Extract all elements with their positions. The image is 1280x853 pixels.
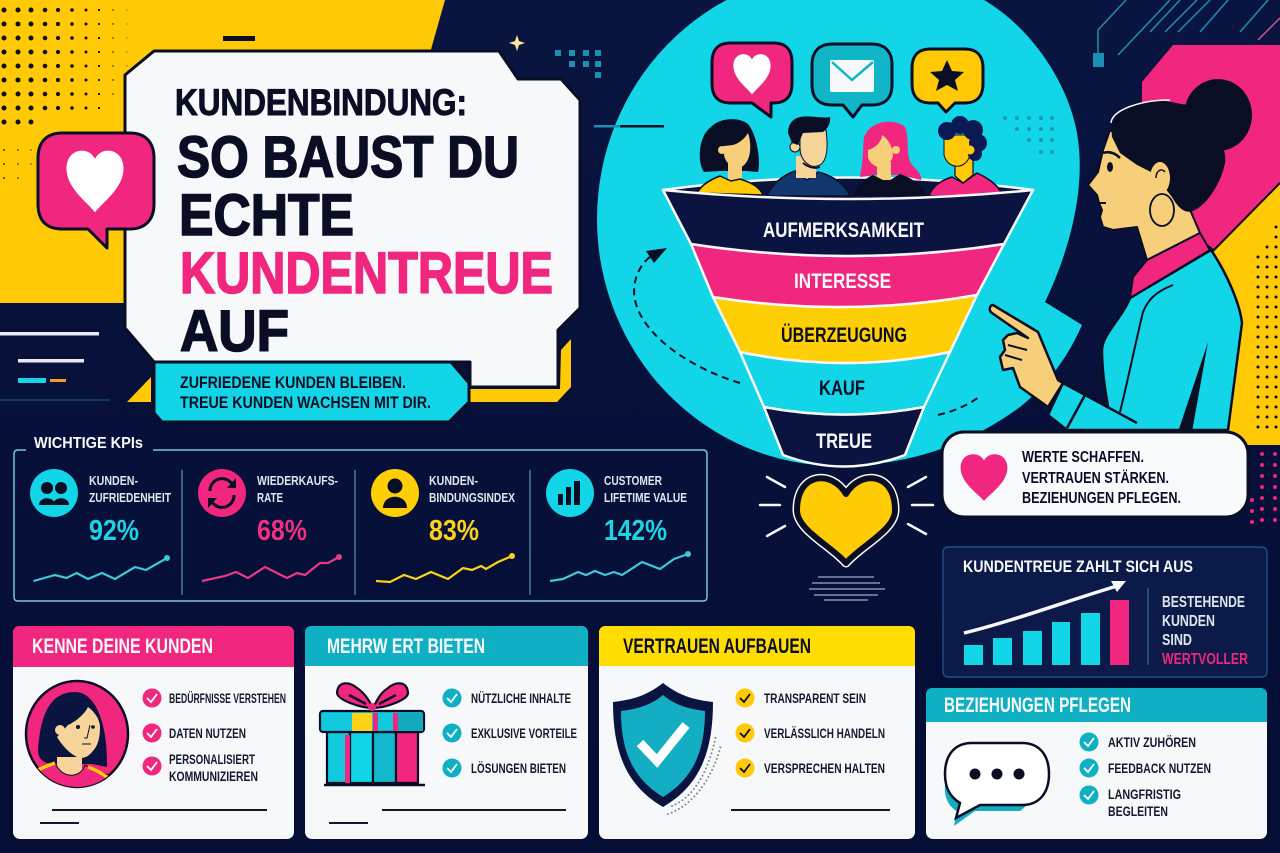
funnel stage: Kauf: KAUF (819, 377, 865, 400)
checklist (1080, 732, 1211, 819)
funnel stage: Treue (764, 407, 924, 466)
KPI 1: ZUFRIEDENHEIT (89, 490, 171, 505)
panel: Mehrwert bieten: MEHRW ERT BIETEN (327, 635, 485, 658)
icon: pink heart speech bubble (38, 133, 154, 248)
yellow background shape top left (0, 0, 445, 303)
cyan circle background (597, 0, 1082, 466)
panel: Kundentreue zahlt sich aus (943, 547, 1267, 677)
icon: gift box (320, 683, 425, 785)
checklist: DATEN NUTZEN (169, 726, 246, 741)
title text: ECHTE (179, 183, 354, 248)
KPI 3: 83% (429, 515, 479, 547)
funnel stage: Aufmerksamkeit (663, 190, 1033, 256)
panel: Kundentreue zahlt sich aus: KUNDENTREUE ZAHLT SICH AUS (963, 557, 1193, 576)
dashed loop arrow (634, 248, 979, 415)
panel: Beziehungen pflegen: BEZIEHUNGEN PFLEGEN (944, 694, 1131, 717)
decorative sparkle and pixels (509, 35, 601, 78)
KPI 1: 92% (89, 515, 139, 547)
neck and face (1088, 130, 1200, 260)
funnel stage: Treue: TREUE (816, 430, 872, 453)
icon: speech bubble heart (712, 43, 792, 117)
callout box: BEZIEHUNGEN PFLEGEN. (1022, 490, 1181, 507)
checklist: LÖSUNGEN BIETEN (471, 761, 566, 776)
callout box: VERTRAUEN STÄRKEN. (1022, 469, 1169, 487)
KPI 2: WIEDERKAUFS- (257, 473, 338, 488)
right background shapes (1093, 0, 1280, 530)
panel: Kundentreue zahlt sich aus: WERTVOLLER (1162, 651, 1248, 668)
customer group (697, 116, 1002, 196)
KPI heading: WICHTIGE KPIs (34, 435, 143, 452)
decorative marks on circle (594, 116, 1054, 154)
person with pointing hand (990, 79, 1252, 432)
funnel stage: Ueberzeugung: ÜBERZEUGUNG (781, 324, 907, 347)
funnel stage: Kauf (740, 352, 950, 414)
title text: AUF (180, 299, 289, 364)
panel: Mehrwert bieten (305, 626, 588, 839)
title text: KUNDENBINDUNG: (175, 82, 467, 123)
callout box: WERTE SCHAFFEN. (1022, 449, 1144, 466)
KPI 4: LIFETIME VALUE (604, 490, 687, 505)
person 2 (767, 116, 850, 196)
title text (175, 82, 553, 364)
checklist (736, 688, 885, 778)
jacket (1048, 250, 1242, 430)
decorative lines left (0, 332, 110, 401)
person 1 (697, 119, 763, 195)
icon: yellow heart with rays (760, 477, 933, 600)
person 3 (853, 122, 927, 196)
icon: speech bubble star (912, 49, 983, 112)
person 4 (929, 116, 1002, 196)
icon: customer portrait (26, 681, 128, 795)
panel: Kenne deine Kunden: KENNE DEINE KUNDEN (32, 635, 213, 658)
funnel stage: Interesse: INTERESSE (794, 270, 891, 293)
checklist: BEDÜRFNISSE VERSTEHEN (169, 691, 286, 706)
hand (990, 305, 1063, 407)
checklist: TRANSPARENT SEIN (764, 691, 866, 706)
checklist (442, 688, 577, 778)
icon: shield (613, 683, 721, 814)
funnel (663, 190, 1033, 466)
KPI 3: KUNDEN- (429, 473, 478, 488)
KPI 4: CUSTOMER (604, 473, 662, 488)
funnel stage: Aufmerksamkeit: AUFMERKSAMKEIT (763, 219, 924, 242)
hair (1184, 79, 1252, 151)
panel: Vertrauen aufbauen (599, 626, 915, 839)
KPI 1 (30, 469, 171, 581)
checklist: FEEDBACK NUTZEN (1108, 761, 1211, 776)
panel: Kundentreue zahlt sich aus: BESTEHENDE (1162, 594, 1245, 611)
checklist: EXKLUSIVE VORTEILE (471, 726, 577, 741)
checklist: VERSPRECHEN HALTEN (764, 761, 885, 776)
cyan subtitle banner: TREUE KUNDEN WACHSEN MIT DIR. (180, 393, 431, 412)
title text: SO BAUST DU (177, 125, 519, 190)
checklist: KOMMUNIZIEREN (169, 769, 258, 784)
ear and earring (1150, 162, 1170, 194)
yellow banner accents (127, 339, 571, 402)
checklist: PERSONALISIERT (169, 752, 256, 767)
cyan subtitle banner (154, 362, 469, 422)
title text: KUNDENTREUE (180, 241, 553, 306)
panel: KPIs (14, 435, 707, 601)
panel: Kundentreue zahlt sich aus: SIND (1162, 632, 1192, 649)
checklist: VERLÄSSLICH HANDELN (764, 726, 885, 741)
funnel back rim (663, 178, 1033, 202)
callout box (942, 432, 1248, 517)
KPI 2: 68% (257, 515, 307, 547)
checklist: NÜTZLICHE INHALTE (471, 691, 571, 706)
panel: Beziehungen pflegen (926, 688, 1267, 839)
funnel stage: Ueberzeugung (713, 295, 977, 363)
icon: speech bubble mail (812, 44, 892, 117)
KPI 4: 142% (604, 515, 667, 547)
icon: callout heart (961, 454, 1007, 501)
panel: Kenne deine Kunden (13, 626, 294, 839)
collar (1130, 233, 1210, 298)
checklist (142, 688, 286, 784)
KPI 3: BINDUNGSINDEX (429, 490, 515, 505)
KPI 2 (198, 469, 342, 581)
checklist: AKTIV ZUHÖREN (1108, 735, 1196, 750)
KPI 2: RATE (257, 490, 283, 505)
checklist: BEGLEITEN (1108, 804, 1168, 819)
icon: chat bubble (945, 743, 1049, 826)
KPI 1: KUNDEN- (89, 473, 138, 488)
cyan subtitle banner: ZUFRIEDENE KUNDEN BLEIBEN. (180, 373, 406, 392)
KPI 3 (371, 469, 515, 582)
funnel stage: Interesse (691, 244, 1004, 307)
KPI 4 (546, 469, 691, 581)
bar chart (964, 581, 1129, 665)
panel: Vertrauen aufbauen: VERTRAUEN AUFBAUEN (623, 635, 811, 658)
panel: Kundentreue zahlt sich aus: KUNDEN (1162, 613, 1215, 630)
checklist: LANGFRISTIG (1108, 787, 1181, 802)
white title panel (125, 51, 580, 387)
